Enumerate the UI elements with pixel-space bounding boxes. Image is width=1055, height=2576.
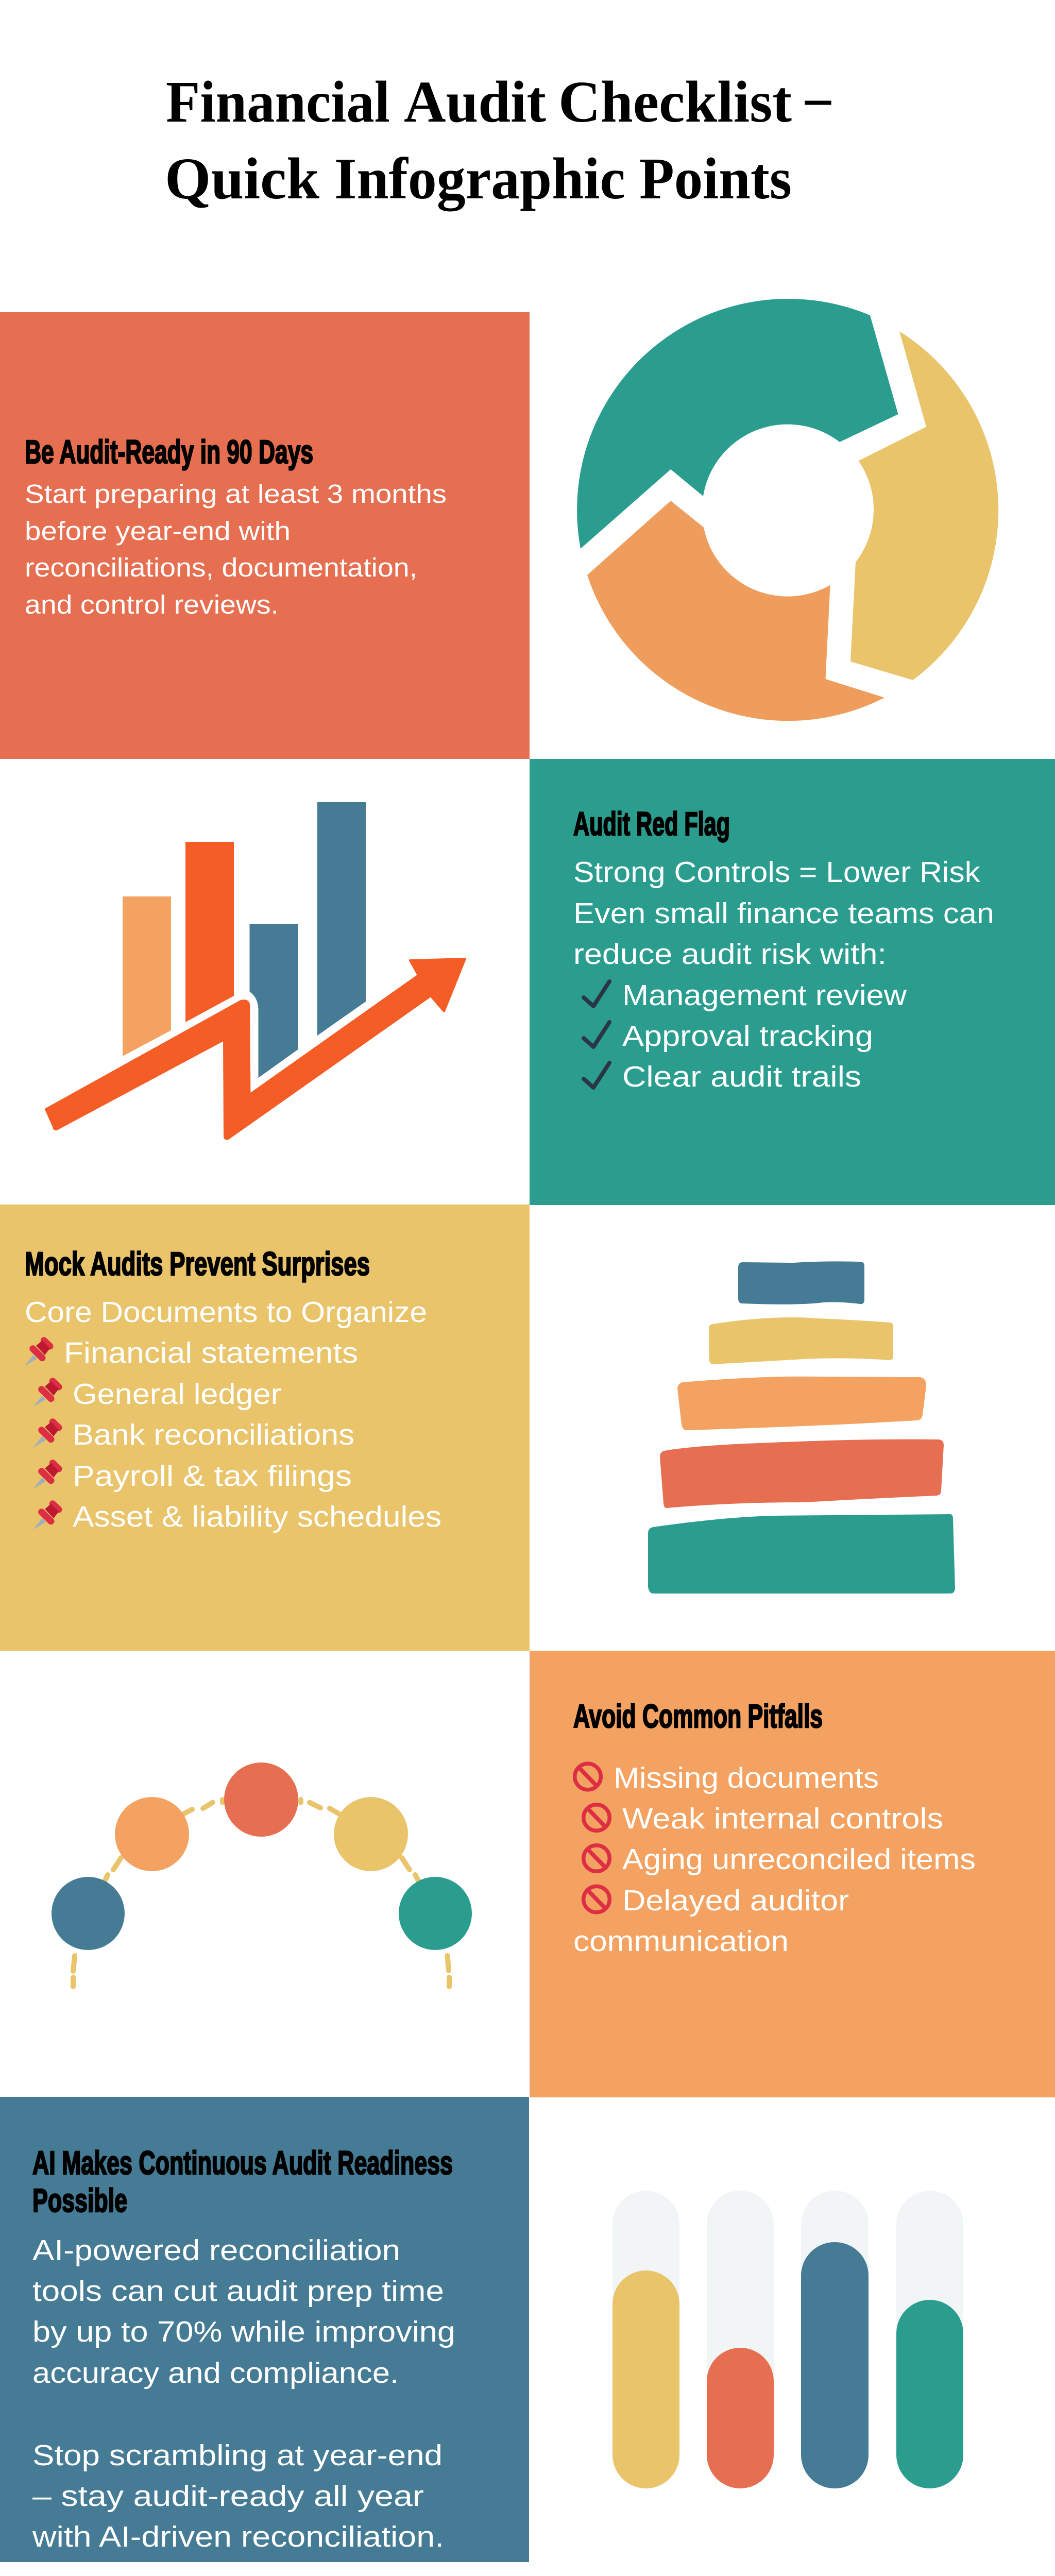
title: Points [639,146,792,211]
list item: asset and liability schedules: Asset & liability schedules [73,1500,441,1533]
heading: AI readiness [32,2144,453,2219]
icon: pushpin [33,1381,59,1407]
list item: missing documents: Missing documents [614,1761,879,1794]
list item: general ledger: General ledger [73,1378,281,1411]
heading: audit red flag: Audit Red Flag [573,805,730,842]
text block: call to action [32,2439,444,2553]
heading: mock audits: Mock Audits Prevent Surprises [25,1245,370,1282]
panel: audit red flag [530,759,1055,1205]
bar: red [707,2191,774,2488]
list item: bank reconciliations: Bank reconciliations [73,1418,354,1451]
list item: delayed auditor communication: communication [573,1925,789,1958]
icon: check mark [584,1022,609,1047]
arrow: rising zigzag [46,959,465,1139]
text block: call to action: Stop scrambling at year-end [32,2439,443,2472]
chart: bars with rising arrow [46,802,465,1139]
text block: preparation advice: and control reviews. [25,590,279,619]
panel: avoid common pitfalls [530,1651,1055,2097]
icon: no entry [575,1764,601,1790]
title: Audit [404,69,546,134]
text block: preparation advice: reconciliations, documentation, [25,553,417,582]
title: Quick [165,146,320,211]
bar: teal [896,2191,963,2488]
list: core documents [24,1336,441,1533]
heading: avoid common pitfalls: Avoid Common Pitfalls [573,1698,823,1735]
text block: AI benefit [32,2234,455,2389]
chart: stacked pyramid blocks [648,1261,955,1594]
heading: AI readiness: Possible [32,2182,127,2219]
heading: be audit-ready: Be Audit-Ready in 90 Days [25,433,313,470]
icon: no entry [584,1845,609,1871]
list item: financial statements: Financial statements [64,1336,358,1369]
list: control checks [584,979,907,1093]
list item: delayed auditor communication [573,1884,849,1958]
list item: payroll and tax filings: Payroll & tax filings [73,1460,352,1493]
text block: preparation advice: before year-end with [25,516,291,546]
icon: check mark [584,981,609,1006]
icon: check mark [584,1063,609,1088]
title: Checklist [558,69,792,134]
text block: preparation advice: Start preparing at least 3 months [25,479,447,509]
icon: pushpin [33,1463,59,1489]
chart: dotted arc of circles [52,1762,472,1987]
icon: pushpin [24,1341,50,1366]
heading: AI readiness: AI Makes Continuous Audit Readiness [32,2144,453,2181]
chart: rounded progress bars [612,2191,963,2488]
icon: pushpin [33,1504,59,1530]
text block: call to action: with AI-driven reconciliation. [32,2520,444,2553]
text block: AI benefit: tools can cut audit prep time [32,2275,444,2308]
bar: blue [801,2191,869,2488]
text block: AI benefit: AI-powered reconciliation [32,2234,400,2267]
bar: yellow [612,2191,679,2488]
text block: preparation advice [25,479,447,619]
panel: AI makes continuous audit readiness possible [0,2097,529,2562]
text block: strong controls: Even small finance teams can [573,897,994,930]
title [165,64,831,211]
list: pitfalls [573,1761,976,1958]
text block: AI benefit: accuracy and compliance. [32,2357,399,2389]
chart: segmented circular arrows [577,299,998,721]
text block: strong controls: Strong Controls = Lower Risk [573,856,981,889]
list item: aging unreconciled items: Aging unreconciled items [622,1843,976,1876]
text block: strong controls [573,856,994,971]
icon: no entry [584,1886,609,1912]
panel: mock audits prevent surprises [0,1205,530,1651]
panel: be audit-ready in 90 days [0,312,530,759]
list item: clear audit trails: Clear audit trails [622,1060,861,1093]
text block: call to action: – stay audit-ready all year [32,2480,424,2513]
list item: weak internal controls: Weak internal controls [622,1802,943,1835]
title: Infographic [334,146,625,211]
title: – [805,64,831,129]
list item: delayed auditor communication: Delayed auditor [622,1884,849,1917]
text: core documents intro: Core Documents to Organize [25,1296,427,1329]
text block: strong controls: reduce audit risk with: [573,938,887,971]
text block: AI benefit: by up to 70% while improving [32,2315,455,2348]
icon: pushpin [33,1422,59,1448]
title: Financial [166,69,390,134]
list item: approval tracking: Approval tracking [622,1020,873,1053]
icon: no entry [584,1805,609,1831]
list item: management review: Management review [622,979,907,1012]
